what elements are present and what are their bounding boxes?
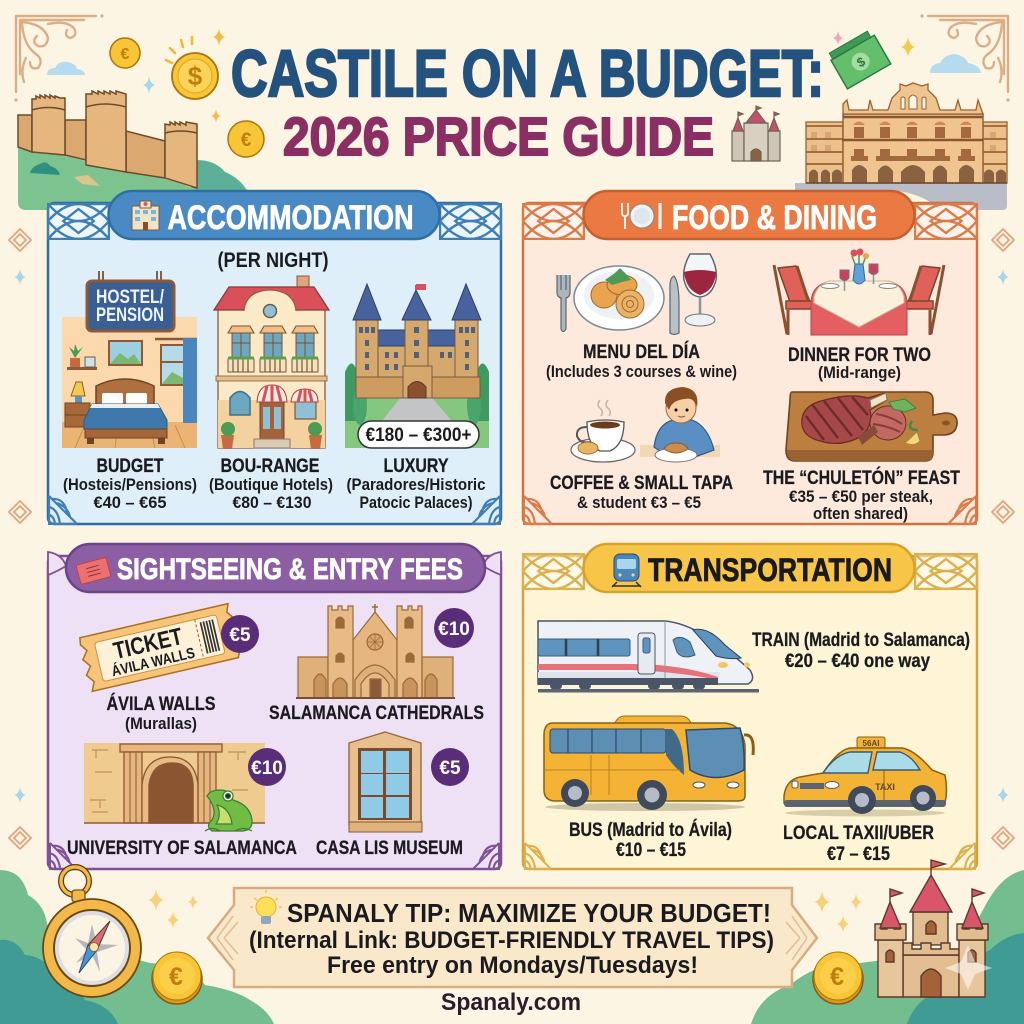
arcade arches bbox=[809, 165, 1006, 183]
panel ornaments bbox=[522, 553, 978, 869]
glasses bbox=[840, 264, 878, 280]
mid-range labels: €80 – €130 bbox=[232, 493, 312, 512]
window and curtain bbox=[161, 345, 184, 385]
label: coffee and tapa: COFFEE & SMALL TAPA bbox=[550, 473, 733, 494]
sparkles bottom left bbox=[148, 889, 198, 928]
lamp and nightstand bbox=[71, 382, 85, 396]
label: train: TRAIN (Madrid to Salamanca) bbox=[752, 630, 970, 651]
price badge: university: €10 bbox=[251, 758, 283, 779]
small steak bbox=[870, 406, 906, 440]
label: chuleton feast: €35 – €50 per steak, bbox=[789, 487, 933, 506]
label: casa lis: CASA LIS MUSEUM bbox=[316, 838, 463, 859]
illustration: ticket: ÁVILA WALLS bbox=[110, 645, 197, 680]
label: avila walls: ÁVILA WALLS bbox=[106, 693, 216, 715]
icon: coin by subtitle bbox=[228, 121, 264, 157]
header pill bbox=[108, 191, 440, 239]
green hill bbox=[18, 147, 248, 210]
illustration: Plaza Mayor palace bbox=[795, 83, 1007, 210]
label: coffee and tapa bbox=[550, 473, 733, 512]
label: chuleton feast: often shared) bbox=[813, 504, 908, 523]
panel background bbox=[48, 556, 501, 869]
icon: coin top left bbox=[110, 38, 140, 68]
label: menu del dia bbox=[546, 341, 737, 381]
illustration: luxury parador bbox=[345, 284, 489, 448]
panel ornaments bbox=[522, 203, 978, 524]
price badge: cathedrals bbox=[434, 608, 474, 648]
label: train: €20 – €40 one way bbox=[785, 651, 930, 672]
luxury labels: Patocic Palaces) bbox=[360, 493, 472, 512]
icon: fairy-tale castle bbox=[875, 860, 992, 997]
label: taxi bbox=[783, 823, 934, 865]
outer wall bbox=[356, 377, 480, 398]
illustration: cathedral bbox=[296, 604, 455, 698]
budget labels: €40 – €65 bbox=[94, 493, 166, 512]
central block bbox=[843, 114, 983, 183]
upper windows bbox=[851, 127, 975, 161]
illustration: taxi: TAXI bbox=[875, 782, 895, 792]
vase bbox=[853, 264, 865, 284]
tower left bbox=[32, 95, 65, 155]
header text: ACCOMMODATION bbox=[168, 199, 414, 237]
illustration: coffee and tapa bbox=[571, 387, 720, 462]
icon: coin bottom right: € bbox=[830, 963, 844, 991]
icon: compass bbox=[43, 867, 141, 997]
icon: coin bottom left bbox=[152, 952, 202, 1004]
knife bbox=[670, 276, 679, 334]
icon: banknote: $ bbox=[854, 53, 868, 70]
label: avila walls bbox=[106, 693, 216, 733]
budget labels: (Hosteis/Pensions) bbox=[63, 475, 197, 494]
budget labels bbox=[63, 456, 197, 512]
header text: FOOD & DINING bbox=[672, 199, 877, 237]
illustration: boutique hotel bbox=[214, 276, 329, 449]
icon: hotel bbox=[132, 201, 159, 230]
label: taxi: LOCAL TAXII/UBER bbox=[783, 823, 934, 844]
icon: red ticket bbox=[76, 557, 111, 585]
price badge: casa lis: €5 bbox=[439, 758, 461, 779]
website footer: Spanaly.com bbox=[441, 989, 581, 1016]
icon: dollar coin bbox=[166, 37, 218, 99]
illustration: dinner table bbox=[774, 248, 944, 335]
panel: accommodation bbox=[47, 191, 502, 524]
illustration: menu del dia bbox=[557, 254, 716, 334]
teal hump bbox=[190, 160, 248, 192]
banner shape bbox=[208, 888, 817, 987]
label: salamanca cathedrals: SALAMANCA CATHEDRALS bbox=[269, 703, 484, 724]
picture bbox=[109, 341, 142, 365]
icon: coin top left: € bbox=[121, 46, 130, 63]
tip note: Free entry on Mondays/Tuesdays! bbox=[327, 952, 698, 979]
illustration: high speed train bbox=[538, 621, 759, 692]
label: bus: BUS (Madrid to Ávila) bbox=[569, 819, 732, 841]
building bbox=[378, 345, 455, 390]
panel: transportation bbox=[522, 544, 978, 869]
side wings bbox=[806, 122, 1007, 183]
sparkles top bbox=[143, 28, 915, 122]
upper windows bbox=[228, 326, 318, 372]
label: chuleton feast: THE “CHULETÓN” FEAST bbox=[763, 467, 960, 489]
price badge: university bbox=[248, 748, 286, 786]
label: avila walls: (Murallas) bbox=[125, 714, 197, 733]
label: taxi: €7 – €15 bbox=[827, 844, 890, 865]
mid-range labels: (Boutique Hotels) bbox=[209, 475, 333, 494]
tower middle bbox=[86, 91, 126, 172]
label: coffee and tapa: & student €3 – €5 bbox=[577, 493, 701, 512]
label: university: UNIVERSITY OF SALAMANCA bbox=[67, 838, 297, 859]
label: train bbox=[752, 630, 970, 672]
illustration: university facade bbox=[84, 743, 265, 831]
panel ornaments bbox=[47, 203, 502, 524]
illustration: luxury parador: €180 – €300+ bbox=[366, 425, 472, 446]
luxury labels: (Paradores/Historic bbox=[346, 475, 486, 494]
luxury labels bbox=[346, 456, 486, 512]
illustration: hostel sign bbox=[87, 271, 174, 331]
icon: train bbox=[612, 554, 641, 587]
label: bus: €10 – €15 bbox=[616, 840, 686, 861]
price badge: cathedrals: €10 bbox=[438, 619, 470, 640]
icon: light bulb bbox=[250, 890, 282, 924]
title bbox=[231, 36, 824, 167]
illustration: hostel sign: HOSTEL/ bbox=[96, 287, 165, 308]
pots bbox=[221, 435, 234, 449]
panel ornaments bbox=[48, 552, 501, 869]
label: dinner for two: (Mid-range) bbox=[818, 363, 901, 382]
table and boy bbox=[640, 445, 720, 457]
mid-range labels bbox=[209, 456, 333, 512]
shelf and plant bbox=[67, 367, 97, 370]
price badge: avila: €5 bbox=[229, 625, 251, 646]
label: bus bbox=[569, 819, 732, 861]
plate bbox=[574, 266, 664, 330]
illustration: hostel room bbox=[62, 317, 197, 448]
price badge: avila bbox=[221, 615, 259, 653]
illustration: taxi: 56AI bbox=[863, 739, 879, 748]
bottom hills right bbox=[751, 870, 1024, 1024]
panel background bbox=[48, 203, 501, 524]
tip link line: (Internal Link: BUDGET-FRIENDLY TRAVEL TIPS) bbox=[249, 927, 774, 954]
label: menu del dia: (Includes 3 courses & wine) bbox=[546, 362, 737, 381]
bed bbox=[96, 379, 154, 405]
fork bbox=[557, 275, 570, 332]
illustration: chuleton steak board bbox=[786, 392, 957, 461]
tip banner bbox=[208, 888, 817, 987]
chairs bbox=[778, 266, 940, 309]
wine glass bbox=[684, 254, 716, 297]
side ornaments bbox=[9, 229, 1014, 849]
ground floor bbox=[230, 392, 250, 415]
tower right bbox=[165, 122, 197, 188]
label: dinner for two bbox=[788, 345, 931, 382]
header text: SIGHTSEEING & ENTRY FEES bbox=[117, 553, 463, 586]
illustration: hostel sign: PENSION bbox=[96, 305, 164, 326]
header pill bbox=[66, 544, 485, 592]
coffee cup bbox=[598, 400, 610, 416]
luxury labels: LUXURY bbox=[384, 456, 449, 477]
wall segments bbox=[18, 115, 165, 178]
bottom hills left bbox=[0, 870, 274, 1024]
panel background bbox=[523, 556, 977, 869]
per night label: (PER NIGHT) bbox=[218, 249, 328, 272]
icon: small castle bbox=[732, 106, 780, 161]
illustration: ticket: TICKET bbox=[111, 623, 185, 665]
icon: dollar coin: $ bbox=[188, 61, 203, 91]
header pill bbox=[584, 191, 914, 239]
illustration: ticket bbox=[78, 603, 242, 692]
table cloth bbox=[811, 281, 907, 335]
label: chuleton feast bbox=[763, 467, 960, 523]
illustration: taxi bbox=[784, 737, 946, 816]
title line 1: CASTILE ON A BUDGET: bbox=[231, 36, 824, 110]
panel: food and dining bbox=[522, 191, 978, 524]
illustration: coach bus bbox=[544, 716, 753, 811]
icon: coin bottom right bbox=[813, 952, 863, 1004]
header text: TRANSPORTATION bbox=[648, 552, 892, 588]
title line 2: 2026 PRICE GUIDE bbox=[283, 107, 714, 167]
clouds bbox=[47, 54, 981, 75]
label: dinner for two: DINNER FOR TWO bbox=[788, 345, 931, 366]
panel background bbox=[523, 203, 977, 524]
illustration: walled city hill bbox=[18, 91, 248, 210]
icon: frog bbox=[205, 790, 252, 831]
header pill bbox=[584, 544, 914, 592]
price badge: casa lis bbox=[431, 748, 469, 786]
sparkles bottom right bbox=[814, 891, 862, 932]
icon: plate and cutlery bbox=[622, 203, 660, 229]
icon: coin bottom left: € bbox=[169, 963, 183, 991]
tip heading: SPANALY TIP: MAXIMIZE YOUR BUDGET! bbox=[287, 898, 771, 928]
illustration: casa lis window bbox=[349, 732, 422, 832]
label: menu del dia: MENU DEL DÍA bbox=[583, 341, 700, 363]
panel: sightseeing and entry fees bbox=[48, 544, 501, 869]
icon: banknote bbox=[827, 29, 891, 89]
icon: coin by subtitle: € bbox=[241, 130, 252, 151]
decorative corner scrolls bbox=[14, 14, 1010, 102]
mid-range labels: BOU-RANGE bbox=[220, 456, 320, 477]
steak bbox=[802, 393, 887, 443]
budget labels: BUDGET bbox=[96, 456, 164, 477]
price pill bbox=[358, 421, 479, 448]
grey plaza bbox=[795, 183, 1007, 210]
